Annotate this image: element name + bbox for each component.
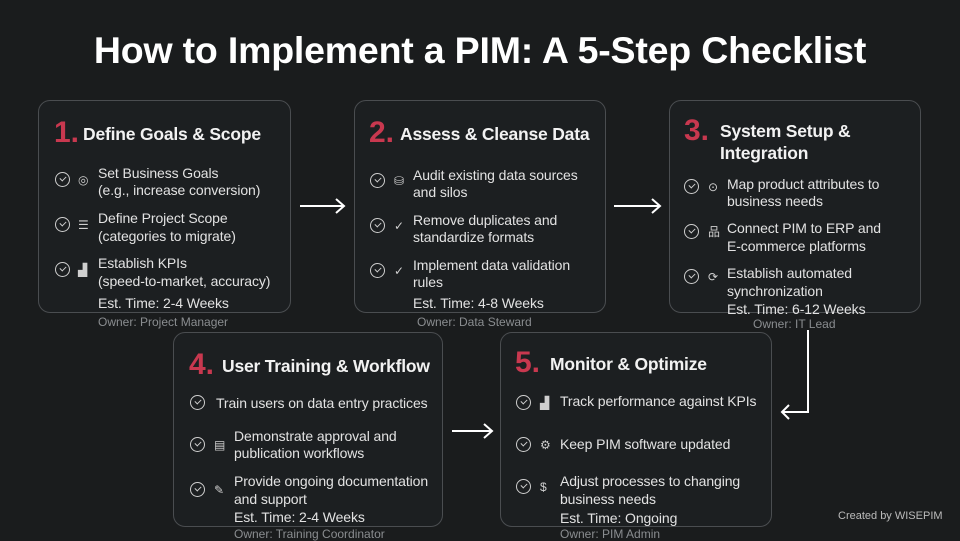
step 2 content (369, 116, 590, 329)
step 1 content: Establish KPIs (98, 255, 187, 271)
step 1 content: ◎ (78, 173, 88, 187)
step 4 content: Owner: Training Coordinator (234, 527, 385, 541)
arrow 1 to 2 (300, 198, 346, 214)
step 4 content: 4. (189, 348, 214, 381)
step 4 content: Provide ongoing documentation (234, 473, 428, 489)
step 1 content: Define Goals & Scope (83, 124, 261, 144)
step 1 content: Define Project Scope (98, 210, 228, 226)
step 1 content: 1. (54, 116, 79, 149)
step 3 content: Establish automated (727, 265, 852, 281)
step 5 content: $ (540, 480, 547, 494)
panel: step 5 (500, 332, 772, 527)
step 3 content: E-commerce platforms (727, 238, 866, 254)
step 1 content (54, 116, 270, 329)
step 1 content: (e.g., increase conversion) (98, 182, 260, 198)
step 1 content: ☰ (78, 218, 89, 232)
step 3 content: 3. (684, 114, 709, 147)
step 2 content: Assess & Cleanse Data (400, 124, 589, 144)
step 4 content: Train users on data entry practices (216, 395, 428, 411)
panel: step 4 (173, 332, 443, 527)
arrow 2 to 3 (614, 198, 662, 214)
step 5 content: Adjust processes to changing (560, 473, 740, 489)
step 2 content: Remove duplicates and (413, 212, 557, 228)
step 5 content: Keep PIM software updated (560, 436, 730, 452)
panel: step 2 (354, 100, 606, 313)
step 4 content: ✎ (214, 483, 224, 497)
step 2 content: rules (413, 274, 443, 290)
step 3 content: 品 (708, 225, 720, 239)
step 2 content: and silos (413, 184, 467, 200)
step 3 content: Connect PIM to ERP and (727, 220, 881, 236)
step 2 content: standardize formats (413, 229, 534, 245)
step 3 content: ⊙ (708, 180, 718, 194)
arrow 3 to 5 (780, 330, 809, 420)
step 2 content: ✓ (394, 264, 404, 278)
step 3 content: Integration (720, 143, 808, 163)
step 3 content (684, 114, 881, 331)
step 3 content: business needs (727, 193, 823, 209)
title: How to Implement a PIM: A 5-Step Checklist (94, 29, 866, 71)
step 3 content: ⟳ (708, 270, 718, 284)
step 5 content: 5. (515, 346, 540, 379)
step 4 content: Demonstrate approval and (234, 428, 397, 444)
arrow 4 to 5 (452, 423, 494, 439)
step 5 content: ⚙ (540, 438, 551, 452)
step 1 content: ▟ (78, 263, 87, 277)
step 5 content: Est. Time: Ongoing (560, 510, 677, 526)
step 1 content: (speed-to-market, accuracy) (98, 273, 270, 289)
step 2 content: Implement data validation (413, 257, 570, 273)
step 2 content: Owner: Data Steward (417, 315, 532, 329)
step 3 content: Owner: IT Lead (753, 317, 836, 331)
step 2 content: 2. (369, 116, 394, 149)
step 1 content: Set Business Goals (98, 165, 218, 181)
step 4 content (189, 348, 430, 541)
step 3 content: Est. Time: 6-12 Weeks (727, 301, 865, 317)
step 4 content: ▤ (214, 438, 225, 452)
panel: step 3 (669, 100, 921, 313)
step 5 content: business needs (560, 491, 656, 507)
credit: Created by WISEPIM (838, 510, 943, 522)
step 5 content: Owner: PIM Admin (560, 527, 660, 541)
step 1 content: (categories to migrate) (98, 228, 236, 244)
step 5 content: Monitor & Optimize (550, 354, 707, 374)
step 4 content: Est. Time: 2-4 Weeks (234, 509, 365, 525)
step 5 content: ▟ (540, 396, 549, 410)
step 4 content: publication workflows (234, 445, 364, 461)
step 4 content: and support (234, 491, 307, 507)
step 2 content: Est. Time: 4-8 Weeks (413, 295, 544, 311)
step 3 content: synchronization (727, 283, 823, 299)
step 3 content: Map product attributes to (727, 176, 879, 192)
step 2 content: ✓ (394, 219, 404, 233)
step 2 content: ⛁ (394, 174, 404, 188)
step 1 content: Owner: Project Manager (98, 315, 228, 329)
step 2 content: Audit existing data sources (413, 167, 578, 183)
step 3 content: System Setup & (720, 121, 850, 141)
step 1 content: Est. Time: 2-4 Weeks (98, 295, 229, 311)
panel: step 1 (38, 100, 291, 313)
step 5 content: Track performance against KPIs (560, 393, 756, 409)
step 4 content: User Training & Workflow (222, 356, 430, 376)
